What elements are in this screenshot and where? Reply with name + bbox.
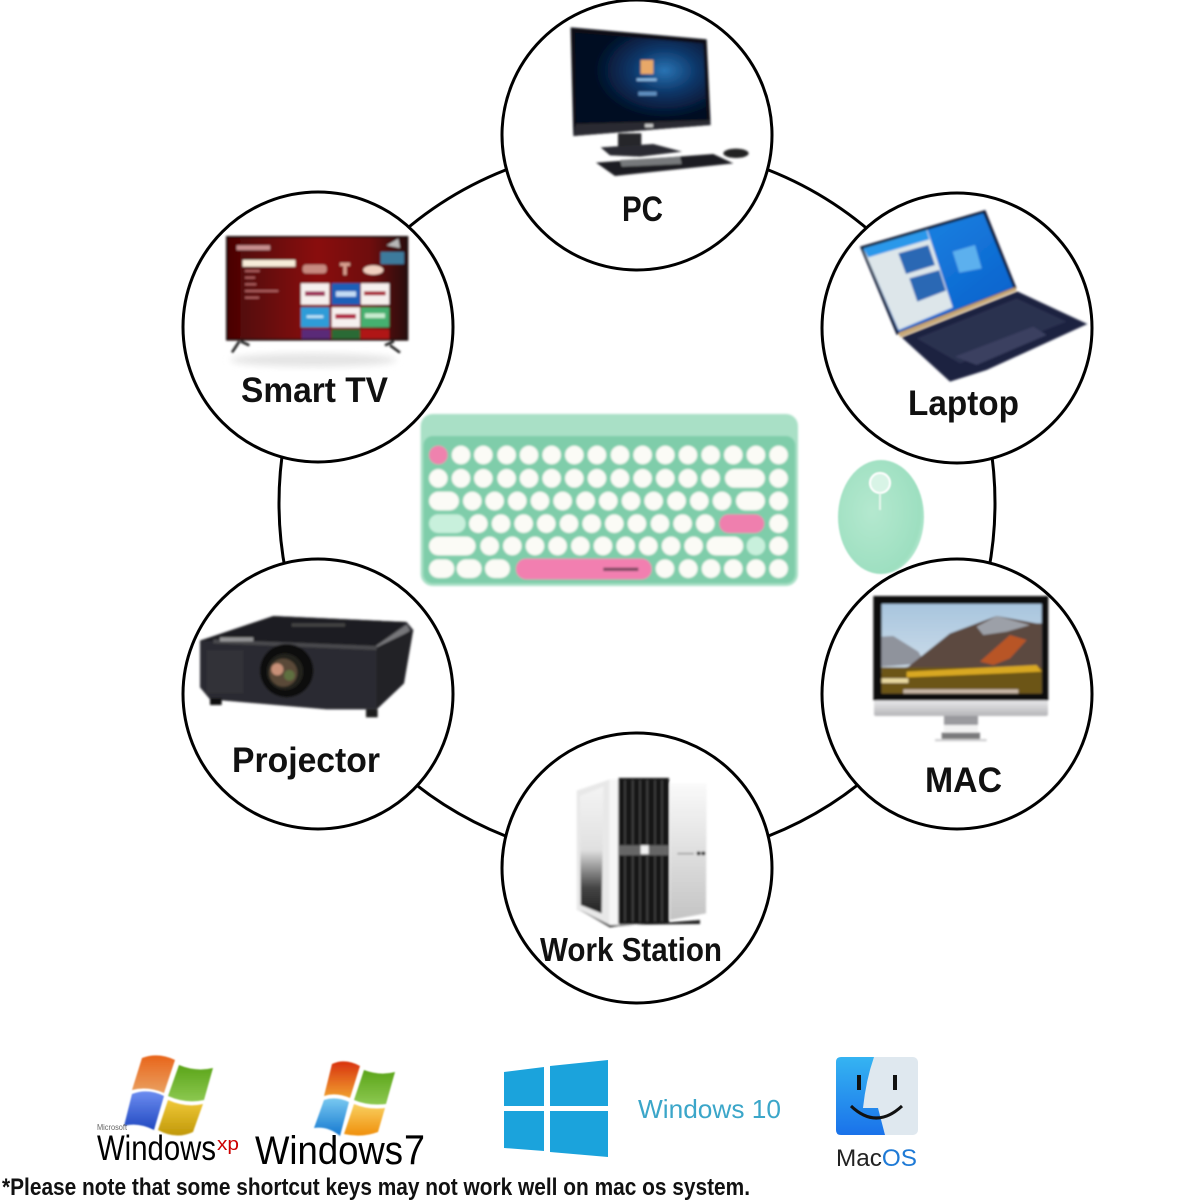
icon: smart TV xyxy=(226,236,408,367)
panel: Laptop xyxy=(822,193,1092,463)
OS logo: Windows 10 xyxy=(504,1060,781,1157)
label: PC: PC xyxy=(622,190,663,229)
mouse xyxy=(838,460,924,574)
icon: projector xyxy=(200,616,413,717)
connecting ring xyxy=(279,145,995,861)
label: Laptop: Laptop xyxy=(908,384,1019,423)
OS logo: Windows XP: xp xyxy=(217,1134,239,1154)
OS logo: Windows 7 xyxy=(255,1061,425,1173)
OS logo: macOS: MacOS xyxy=(836,1145,917,1172)
OS logo: macOS xyxy=(836,1057,918,1172)
icon: desktop PC xyxy=(571,27,749,176)
panel: PC xyxy=(502,0,772,270)
icon: workstation tower xyxy=(577,778,707,927)
label: MAC: MAC xyxy=(925,761,1002,800)
OS logo: Windows XP xyxy=(97,1055,239,1168)
panel: Work Station xyxy=(502,733,772,1003)
panel: Smart TV xyxy=(183,192,453,462)
OS logo: Windows XP: Windows xyxy=(97,1129,216,1168)
OS logo: Windows 7: 7 xyxy=(404,1126,425,1173)
label: Smart TV: Smart TV xyxy=(241,371,389,410)
OS logo: Windows XP: Microsoft xyxy=(97,1123,128,1132)
icon: iMac xyxy=(873,596,1048,741)
panel: Projector xyxy=(183,559,453,829)
label: Work Station: Work Station xyxy=(540,931,722,968)
keyboard xyxy=(421,414,798,586)
label: Projector: Projector xyxy=(232,741,380,780)
panel: MAC xyxy=(822,559,1092,829)
icon: laptop xyxy=(860,210,1087,382)
OS logo: Windows 10: Windows 10 xyxy=(638,1094,781,1124)
OS logo: Windows 7: Windows xyxy=(255,1129,403,1173)
